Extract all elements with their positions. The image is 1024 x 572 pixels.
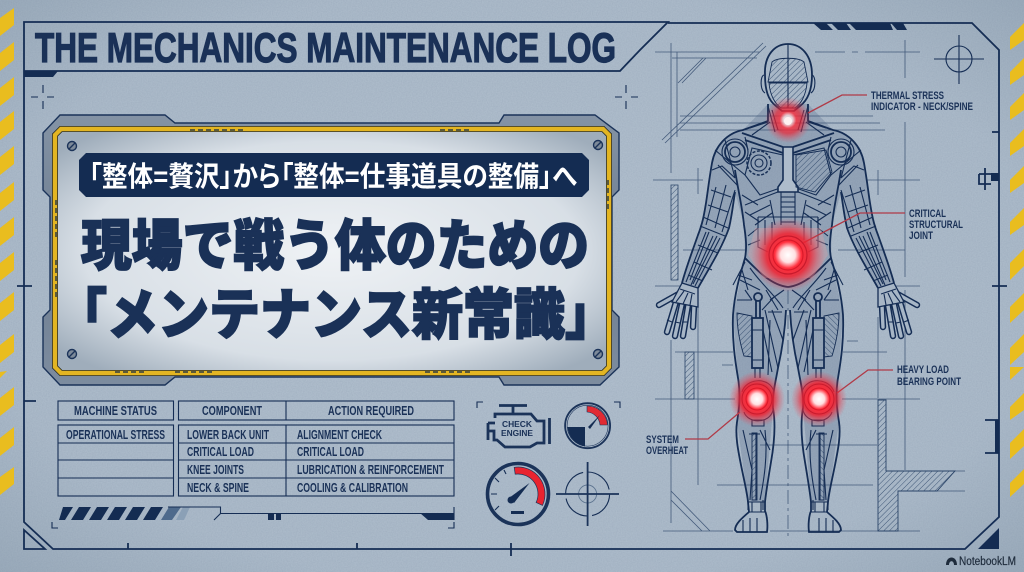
hazard status bar (52, 507, 454, 528)
body cells: CRITICAL LOAD (297, 444, 364, 459)
blueprint background drawing (653, 35, 984, 540)
label: heavy load: HEAVY LOAD (897, 364, 949, 376)
header cells: ACTION REQUIRED (328, 403, 414, 418)
registration marks (31, 85, 638, 109)
screws (68, 140, 602, 358)
notebooklm watermark: NotebookLM (959, 556, 1016, 568)
label: critical joint: CRITICAL (909, 208, 946, 220)
body cells: LOWER BACK UNIT (187, 427, 269, 442)
head (761, 44, 815, 111)
label: critical joint (909, 208, 963, 242)
hotspot: neck (765, 97, 811, 143)
main headline panel (43, 115, 619, 385)
headline line two: 「メンテナンス新常識」 (56, 284, 616, 346)
body cells: LUBRICATION & REINFORCEMENT (297, 462, 444, 477)
body cells (66, 427, 444, 495)
body cells: CRITICAL LOAD (187, 444, 254, 459)
crosshair target (934, 35, 984, 84)
label: thermal stress: THERMAL STRESS (871, 90, 944, 102)
icon: small gauge (565, 403, 610, 448)
header cells (74, 403, 414, 418)
body cells: ALIGNMENT CHECK (297, 427, 382, 442)
yellow frame (55, 129, 609, 373)
subtitle: 「整体=贅沢」から「整体=仕事道具の整備」へ (89, 161, 578, 192)
yellow frame highlight (55, 129, 609, 373)
label: system overheat: OVERHEAT (646, 445, 688, 457)
label: thermal stress: INDICATOR - NECK/SPINE (871, 101, 973, 113)
left hazard stripes (0, 8, 14, 495)
label: heavy load (897, 364, 961, 388)
label: system overheat (646, 434, 688, 457)
label: critical joint: JOINT (909, 230, 933, 242)
title: THE MECHANICS MAINTENANCE LOG (35, 24, 616, 71)
body cells: OPERATIONAL STRESS (66, 427, 165, 442)
chest gear (747, 151, 771, 175)
label: critical joint: STRUCTURAL (909, 219, 963, 231)
icon: check engine (488, 406, 550, 447)
body tint (682, 104, 894, 502)
label: heavy load: BEARING POINT (897, 376, 961, 388)
right hazard stripes (1010, 23, 1024, 497)
hotspot: left knee (729, 371, 785, 427)
table grid (58, 401, 454, 496)
header cells: MACHINE STATUS (74, 403, 157, 418)
label: thermal stress (871, 90, 973, 113)
body cells: COOLING & CALIBRATION (297, 480, 408, 495)
pelvis plate (748, 228, 828, 278)
frame wear marks (56, 130, 608, 372)
metal plate (43, 115, 619, 385)
icon: reticle (556, 462, 619, 526)
header cells: COMPONENT (202, 403, 262, 418)
callout lines (685, 95, 905, 439)
icon cluster (477, 402, 620, 526)
icon: check engine: ENGINE (501, 428, 533, 438)
label: system overheat: SYSTEM (646, 434, 679, 446)
body cells: KNEE JOINTS (187, 462, 244, 477)
body cells: NECK & SPINE (187, 480, 249, 495)
sternum (778, 147, 798, 192)
headline line one: 現場で戦う体のための (81, 215, 589, 277)
icon: check engine: CHECK (502, 419, 533, 429)
spine column (758, 192, 818, 247)
robot body figure (659, 44, 917, 532)
icon: large gauge (488, 464, 548, 524)
hotspot: right knee (791, 371, 847, 427)
hotspot: abdomen (751, 218, 825, 292)
hatched chest plate (796, 150, 832, 192)
status table (58, 401, 454, 496)
subtitle bar (79, 153, 589, 197)
